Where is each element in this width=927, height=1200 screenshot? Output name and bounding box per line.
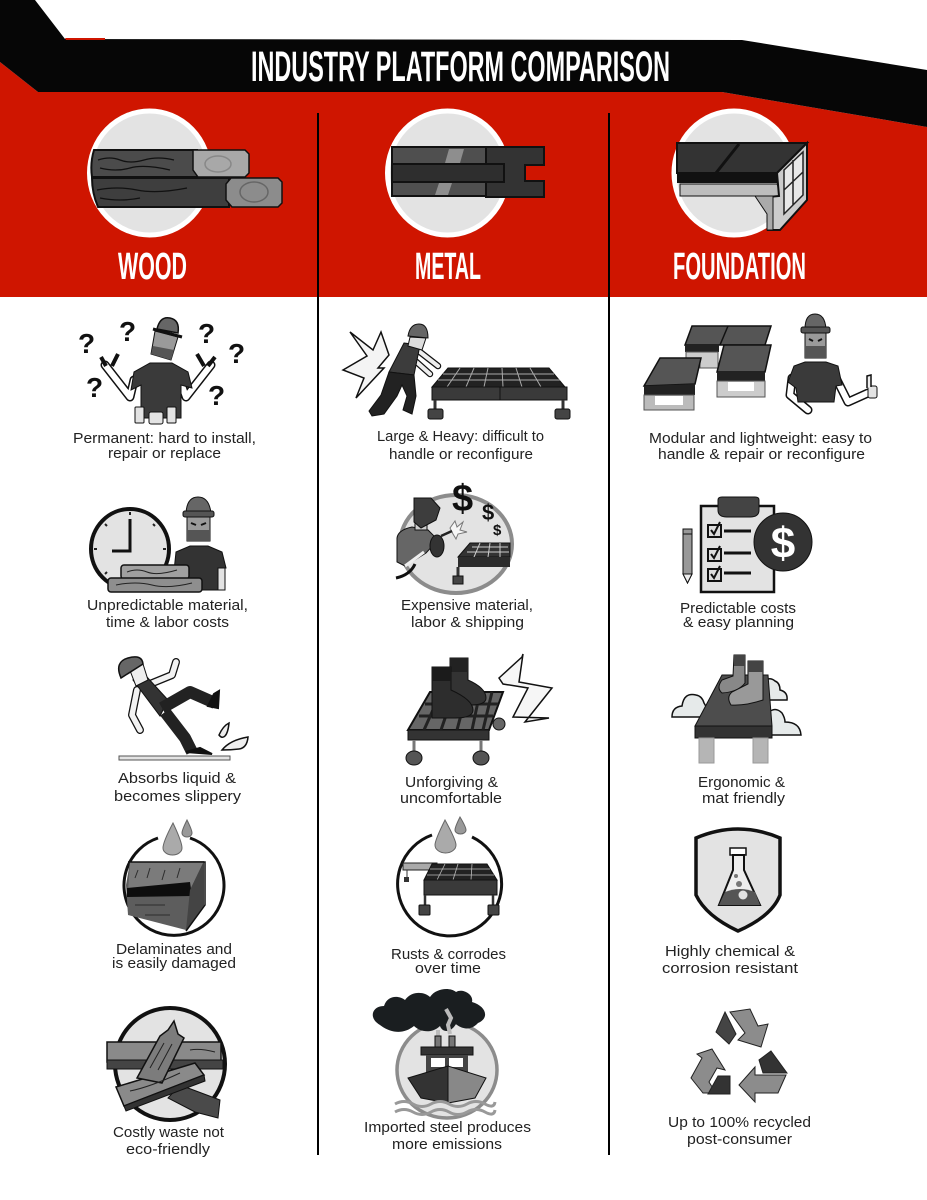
caption: corrosion resistant xyxy=(662,961,798,977)
item: modular xyxy=(644,314,877,463)
icon: confused worker: ? xyxy=(86,372,103,403)
column: metal xyxy=(343,111,570,1153)
icon: rusting platform and drops xyxy=(398,817,502,936)
icon: clock, worker and logs xyxy=(91,497,226,592)
caption: Large & Heavy: difficult to xyxy=(377,429,544,445)
icon: recycling arrows xyxy=(691,1009,787,1102)
header red band xyxy=(0,62,927,297)
caption xyxy=(649,431,872,463)
icon: worker lifting heavy platform xyxy=(343,324,570,419)
icon: shield with flask xyxy=(696,829,780,931)
caption: repair or replace xyxy=(108,446,221,462)
icon: damaged wood block and drops xyxy=(124,820,224,935)
icon: foundation platform in circle xyxy=(674,111,807,235)
caption: is easily damaged xyxy=(112,956,236,972)
icon: confused worker xyxy=(78,316,245,424)
icon: boots on soft platform with clouds xyxy=(672,655,801,763)
caption xyxy=(668,1115,811,1148)
caption: & easy planning xyxy=(683,615,794,631)
caption xyxy=(114,771,242,805)
caption: becomes slippery xyxy=(114,789,242,805)
caption xyxy=(364,1120,531,1153)
caption: over time xyxy=(415,961,481,977)
caption: Rusts & corrodes xyxy=(391,947,506,963)
item: chemical resistant xyxy=(662,829,798,977)
caption: Unpredictable material, xyxy=(87,598,248,614)
caption: Modular and lightweight: easy to xyxy=(649,431,872,447)
item: rusts xyxy=(391,817,506,977)
caption: labor & shipping xyxy=(411,615,524,631)
caption: mat friendly xyxy=(702,791,786,807)
caption xyxy=(662,944,798,977)
heading: foundation: FOUNDATION xyxy=(673,246,806,288)
caption: eco-friendly xyxy=(126,1142,211,1158)
item: costly waste xyxy=(107,1008,225,1158)
icon: confused worker: ? xyxy=(78,328,95,359)
item: predictable costs xyxy=(680,497,812,631)
item: hard to install xyxy=(73,316,256,462)
item: unpredictable costs xyxy=(87,497,248,631)
caption: Up to 100% recycled xyxy=(668,1115,811,1131)
caption: Absorbs liquid & xyxy=(118,771,236,787)
caption xyxy=(401,598,533,631)
item: expensive xyxy=(396,478,533,631)
caption xyxy=(87,598,248,631)
heading: wood: WOOD xyxy=(118,246,187,288)
caption: uncomfortable xyxy=(400,791,502,807)
icon: welder and dollar signs: $ xyxy=(482,500,494,525)
caption: handle & repair or reconfigure xyxy=(658,447,865,463)
column: wood xyxy=(73,111,282,1158)
icon: cargo ship with smoke xyxy=(373,989,497,1118)
icon: broken boards in circle xyxy=(107,1008,225,1120)
icon: confused worker: ? xyxy=(208,380,225,411)
icon: boots on metal platform with bolt xyxy=(406,654,552,765)
caption: handle or reconfigure xyxy=(389,447,533,463)
caption xyxy=(400,775,502,807)
icon: checklist clipboard with dollar coin: $ xyxy=(771,519,795,568)
icon: confused worker: ? xyxy=(119,316,136,347)
caption: Highly chemical & xyxy=(665,944,795,960)
caption xyxy=(391,947,506,977)
caption xyxy=(113,1125,224,1158)
column: foundation xyxy=(644,111,877,1148)
caption: Unforgiving & xyxy=(405,775,498,791)
caption xyxy=(680,601,796,631)
icon: metal grating in circle xyxy=(388,111,544,235)
caption: Predictable costs xyxy=(680,601,796,617)
heading: metal: METAL xyxy=(415,246,481,288)
caption: Delaminates and xyxy=(116,942,232,958)
caption: post-consumer xyxy=(687,1132,792,1148)
caption: more emissions xyxy=(392,1137,502,1153)
caption xyxy=(377,429,544,463)
icon: slipping worker xyxy=(119,657,248,760)
item: slippery xyxy=(114,657,248,805)
icon: confused worker: ? xyxy=(228,338,245,369)
item: delaminates xyxy=(112,820,236,972)
caption: Permanent: hard to install, xyxy=(73,431,256,447)
item: large and heavy xyxy=(343,324,570,463)
item: ergonomic xyxy=(672,655,801,807)
icon: wood planks in circle xyxy=(90,111,282,235)
icon: welder and dollar signs: $ xyxy=(452,478,473,520)
caption: Expensive material, xyxy=(401,598,533,614)
title banner xyxy=(0,0,927,127)
item: recycled xyxy=(668,1009,811,1148)
icon: welder and dollar signs: $ xyxy=(493,522,502,539)
caption xyxy=(112,942,236,972)
icon: confused worker: ? xyxy=(198,318,215,349)
caption xyxy=(698,775,786,807)
caption: Imported steel produces xyxy=(364,1120,531,1136)
item: unforgiving xyxy=(400,654,552,807)
caption: Ergonomic & xyxy=(698,775,785,791)
icon: modular panels and worker thumbs up xyxy=(644,314,877,410)
item: emissions xyxy=(364,989,531,1153)
caption xyxy=(73,431,256,462)
caption: Costly waste not xyxy=(113,1125,224,1141)
caption: time & labor costs xyxy=(106,615,229,631)
icon: welder and dollar signs xyxy=(396,478,512,593)
